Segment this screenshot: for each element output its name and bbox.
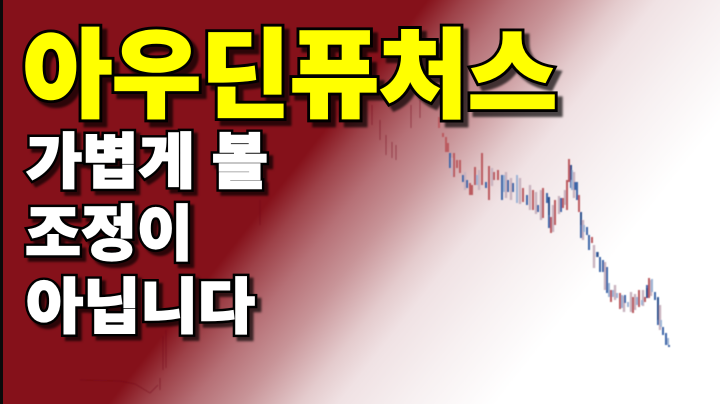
blue candles (450, 153, 669, 347)
subtitle line 2: 조정이 (25, 201, 193, 268)
dark wick accents (549, 165, 658, 320)
red candles (439, 117, 649, 313)
candlestick chart (80, 100, 669, 393)
subtitle line 2: 조정이 (25, 201, 193, 268)
faint candles in red area (80, 100, 420, 393)
left black edge bar (0, 0, 3, 404)
pale blue candles (477, 170, 668, 345)
title: 아우딘퓨처스 (23, 23, 557, 130)
subtitle line 3: 아닙니다 (26, 274, 255, 341)
pale candle shadows (452, 158, 660, 330)
subtitle line 3: 아닙니다 (26, 274, 255, 341)
subtitle line 1: 가볍게 볼 (26, 129, 268, 196)
title: 아우딘퓨처스 (23, 23, 557, 130)
subtitle line 1: 가볍게 볼 (26, 129, 268, 196)
